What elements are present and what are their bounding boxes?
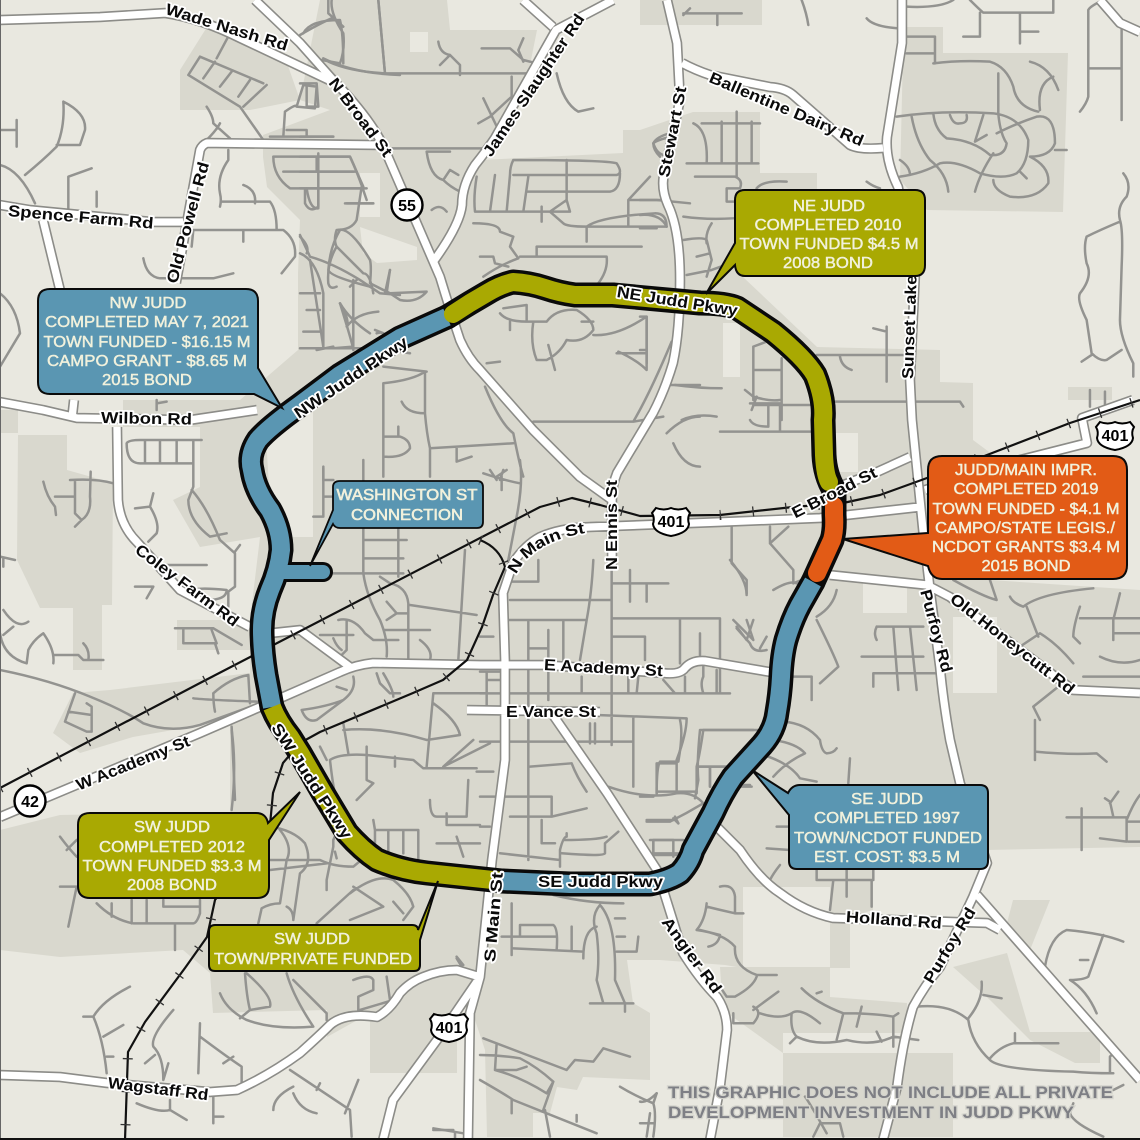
segment: NW Judd [251,317,447,707]
segment: Judd/Main improvement [817,506,834,573]
callout: SW Judd town/private: SW JUDD [274,931,350,948]
route shield: NC 55: 55 [398,198,416,215]
callout: NE Judd [706,190,925,294]
callout: SW Judd 2012: SW JUDD [134,819,210,836]
callout: NW Judd: CAMPO GRANT - $8.65 M [47,353,247,370]
route shield: US 401 center [652,508,690,536]
callout: Washington St connection [310,481,483,566]
callout: Judd/Main improvement [843,456,1127,579]
callout: NW Judd: 2015 BOND [102,372,192,389]
label: Angier Rd: Angier Rd [658,914,724,997]
label: Coley Farm Rd: Coley Farm Rd [132,542,242,630]
route shield: US 401 east [1096,422,1134,450]
label: E Broad St: E Broad St [789,464,881,522]
label: N Ennis St: N Ennis St [604,479,621,570]
callout: SE Judd [752,770,988,869]
callout: SE Judd: TOWN/NCDOT FUNDED [794,830,982,847]
route shield: NC 42 [14,786,46,816]
Judd Parkway ring road [251,282,834,884]
callout: Washington St connection: WASHINGTON ST [336,487,478,504]
callout: NE Judd: NE JUDD [793,198,865,215]
label: Sunset Lake: Sunset Lake [900,275,921,379]
label: Purfoy Rd south: Purfoy Rd [921,905,979,987]
route shield: US 401 east: 401 [1102,428,1128,445]
callout: Judd/Main improvement: NCDOT GRANTS $3.4 M [932,539,1120,556]
callout: Judd/Main improvement: CAMPO/STATE LEGIS./ [935,520,1116,537]
callout: NW Judd [38,289,282,408]
disclaimer note: THIS GRAPHIC DOES NOT INCLUDE ALL PRIVATE [668,1083,1113,1102]
callout: SW Judd 2012 [78,792,300,898]
route shield: US 401 south [430,1014,468,1042]
label: E Academy St: E Academy St [544,657,664,680]
disclaimer note [668,1083,1113,1122]
label: Wilbon Rd: Wilbon Rd [101,410,192,429]
callout: Judd/Main improvement: TOWN FUNDED - $4.1 M [932,501,1120,518]
label: Spence Farm Rd: Spence Farm Rd [7,203,154,233]
label: SE Judd Pkwy: SE Judd Pkwy [538,874,663,891]
callout: Judd/Main improvement: JUDD/MAIN IMPR. [955,462,1097,479]
label: S Main St: S Main St [482,871,507,963]
callout: Washington St connection: CONNECTION [351,507,463,524]
callout: SE Judd: EST. COST: $3.5 M [814,849,960,866]
route shield: NC 55 [392,190,422,220]
label: Old Powell Rd: Old Powell Rd [164,160,213,285]
railroad lines [0,400,1140,1140]
callout: SW Judd town/private [209,881,438,971]
callout: NE Judd: TOWN FUNDED $4.5 M [740,236,918,253]
label: W Academy St: W Academy St [74,733,193,794]
label: Ballentine Dairy Rd: Ballentine Dairy Rd [706,70,866,150]
label: NW Judd Pkwy: NW Judd Pkwy [292,334,411,422]
callout: SW Judd 2012: TOWN FUNDED $3.3 M [82,858,262,875]
label: Purfoy Rd north: Purfoy Rd [916,588,955,674]
segment: NE Judd [453,282,829,482]
label: Wade Nash Rd: Wade Nash Rd [163,1,290,55]
segment: SE Judd [502,582,813,884]
callout: Judd/Main improvement: 2015 BOND [982,558,1070,575]
label: Wagstaff Rd: Wagstaff Rd [107,1075,209,1104]
label: N Broad St: N Broad St [325,75,395,161]
ring outline [251,282,834,884]
label: James Slaughter Rd: James Slaughter Rd [480,11,588,160]
route shield: US 401 center: 401 [658,514,684,531]
label: E Vance St: E Vance St [506,704,597,721]
disclaimer note: DEVELOPMENT INVESTMENT IN JUDD PKWY [668,1103,1075,1122]
label: SW Judd Pkwy: SW Judd Pkwy [267,721,355,842]
segment: SW Judd [272,707,502,881]
label: Stewart St: Stewart St [656,84,691,179]
callout: NW Judd: COMPLETED MAY 7, 2021 [45,314,249,331]
callout: SE Judd: SE JUDD [851,791,923,808]
route shield: US 401 south: 401 [436,1020,462,1037]
label: Holland Rd: Holland Rd [845,909,942,933]
callout: NE Judd: 2008 BOND [783,255,873,272]
callout: NW Judd: TOWN FUNDED - $16.15 M [44,334,250,351]
callout: SE Judd: COMPLETED 1997 [814,810,960,827]
callout: NE Judd: COMPLETED 2010 [754,217,902,234]
label: Old Honeycutt Rd: Old Honeycutt Rd [946,591,1077,698]
callout: SW Judd 2012: COMPLETED 2012 [99,839,245,856]
route shield: NC 42: 42 [21,794,39,811]
label: N Main St: N Main St [505,521,587,576]
callout: SW Judd town/private: TOWN/PRIVATE FUNDED [214,951,412,968]
callout: NW Judd: NW JUDD [110,295,186,312]
callout: Judd/Main improvement: COMPLETED 2019 [954,481,1098,498]
label: NE Judd Pkwy: NE Judd Pkwy [616,284,739,320]
segment: Washington St connection stub [275,565,323,579]
callout: SW Judd 2012: 2008 BOND [127,877,217,894]
